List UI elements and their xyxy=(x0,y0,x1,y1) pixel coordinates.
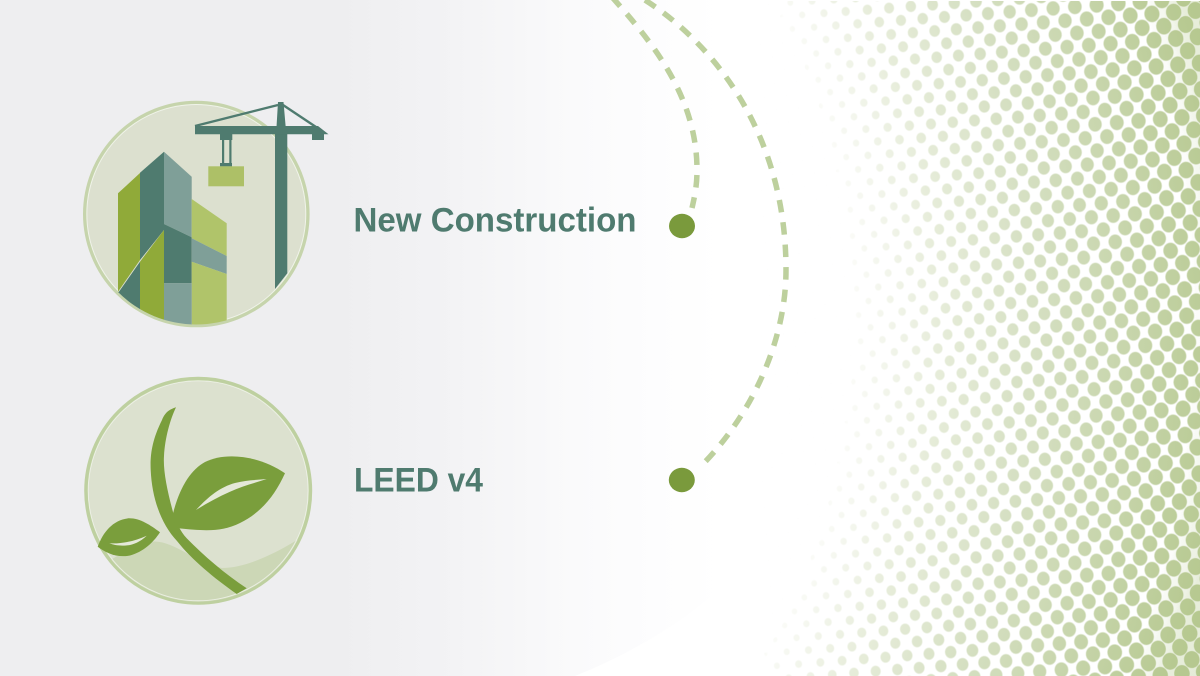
stem xyxy=(151,407,247,594)
big leaf xyxy=(172,456,285,530)
crane load xyxy=(208,166,244,186)
dashed connector: New Construction xyxy=(612,0,697,208)
small leaf highlight xyxy=(109,536,147,546)
crane xyxy=(195,102,328,289)
marker: LEED v4 xyxy=(669,468,695,492)
dashed connector: LEED v4 xyxy=(645,0,786,468)
small leaf xyxy=(98,518,160,556)
icon: sprout xyxy=(86,379,310,610)
building xyxy=(110,152,227,328)
label: New Construction: New Construction xyxy=(354,202,636,240)
icon: building and crane xyxy=(85,102,328,328)
white arc at bottom of background xyxy=(575,585,760,676)
label: LEED v4: LEED v4 xyxy=(354,462,483,500)
big leaf highlight xyxy=(196,479,267,510)
halftone dot field xyxy=(760,1,1200,676)
marker: New Construction xyxy=(669,214,695,238)
ground wave xyxy=(111,540,298,602)
